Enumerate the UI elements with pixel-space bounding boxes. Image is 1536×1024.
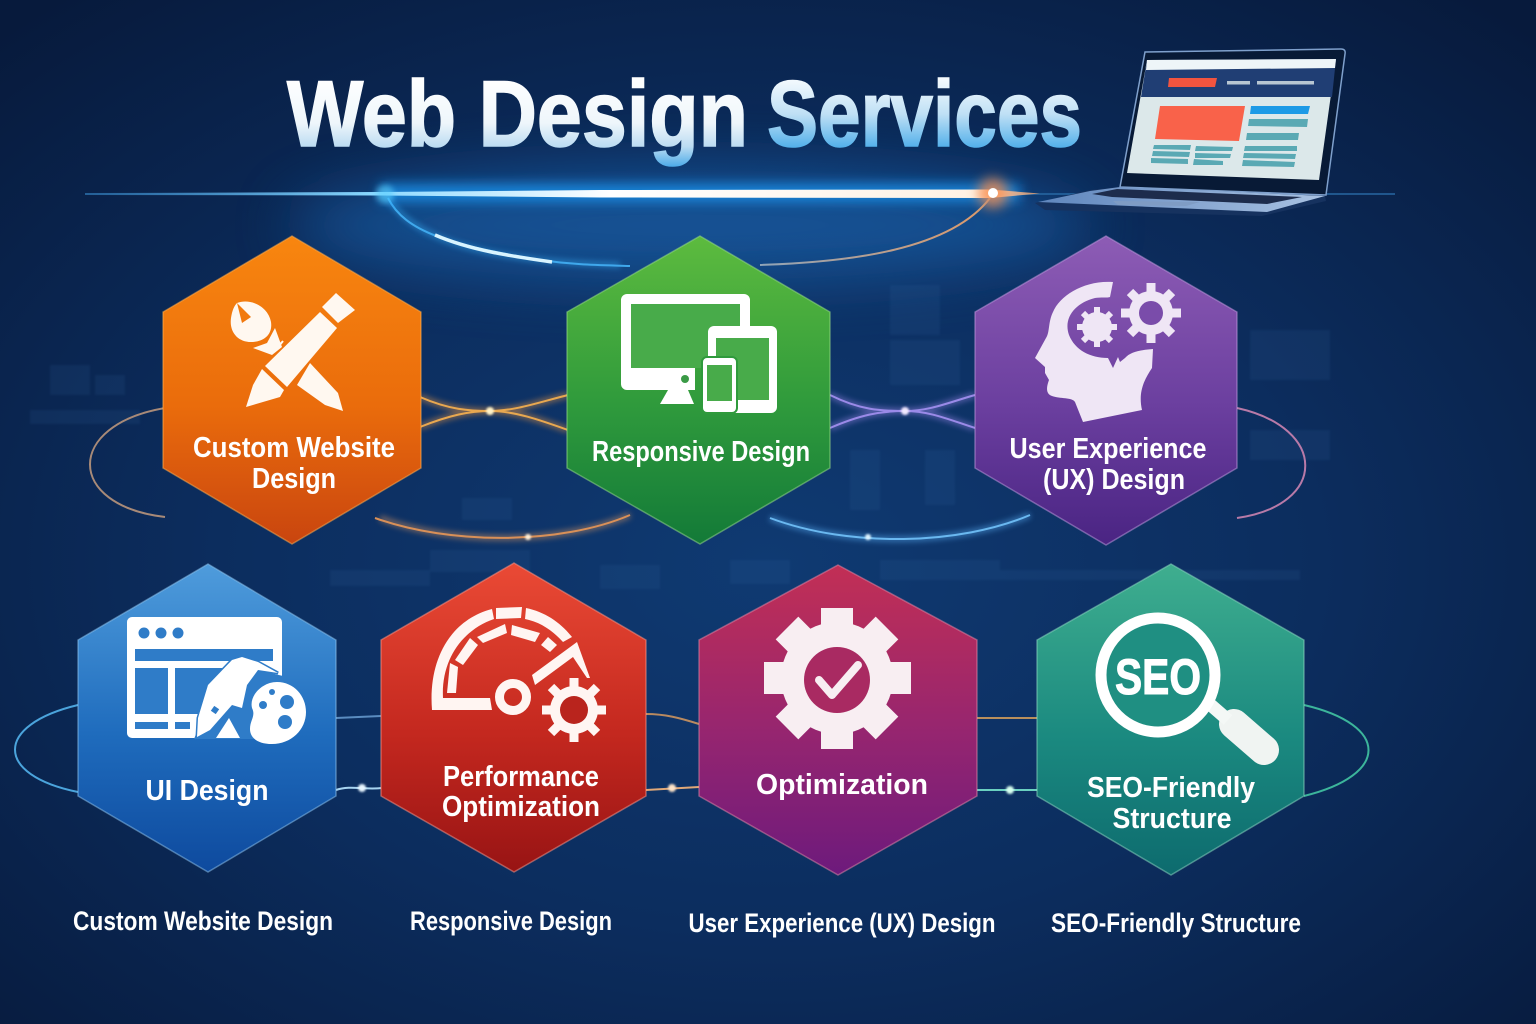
light beam: [85, 178, 1395, 208]
label: User Experience: [1010, 433, 1206, 465]
panel: Responsive Design: [567, 236, 830, 544]
decorative orbit rings: top row: [90, 395, 1305, 539]
label: Optimization: [756, 769, 928, 801]
top glowing arc: [388, 198, 990, 266]
caption: SEO-Friendly Structure: SEO-Friendly Structure: [1051, 908, 1301, 938]
decorative orbit rings: top row glow: [380, 395, 1030, 539]
label: Design: [252, 463, 336, 495]
icon: SEO magnifier: [1101, 618, 1264, 750]
label: (UX) Design: [1043, 464, 1185, 496]
panel: Performance Optimization: [381, 563, 646, 872]
icon: pencil and wrench: [231, 293, 355, 411]
label: [1087, 772, 1255, 835]
decorative orbit rings: bottom row: [15, 705, 1368, 796]
title: Web Design: [287, 61, 748, 166]
panel: Custom Website Design: [163, 236, 421, 544]
icon: laptop: [1035, 49, 1345, 216]
label: Structure: [1112, 803, 1232, 835]
background glow behind light beam: [290, 170, 1090, 280]
label: Performance: [443, 761, 599, 793]
panel: Optimization: [699, 565, 977, 875]
label: Responsive Design: [592, 436, 810, 468]
faint background website wireframes: [30, 285, 1330, 589]
icon: gauge with gear: [432, 607, 606, 742]
panel: UI Design: [78, 564, 336, 872]
caption: Custom Website Design: Custom Website Design: [73, 906, 333, 936]
icon: responsive devices: [621, 294, 777, 413]
label: Custom Website: [193, 432, 395, 464]
label: [442, 761, 600, 823]
icon: gear with checkmark: [764, 608, 911, 749]
title: Services: [767, 61, 1082, 166]
label: Optimization: [442, 791, 600, 823]
connector glints: [358, 407, 1014, 794]
icon: head with gears: [1035, 282, 1181, 422]
panel: SEO-Friendly Structure: [1037, 564, 1304, 875]
icon: SEO magnifier: SEO: [1115, 649, 1201, 705]
label: [1010, 433, 1206, 496]
caption: User Experience (UX) Design: User Experience (UX) Design: [688, 908, 996, 938]
icon: window with brush and palette: [127, 617, 306, 744]
title: [287, 61, 1082, 166]
label: [193, 432, 395, 495]
label: SEO-Friendly: [1087, 772, 1255, 804]
caption: Responsive Design: Responsive Design: [410, 906, 612, 936]
label: UI Design: [146, 775, 268, 807]
panel: User Experience (UX) Design: [975, 236, 1237, 545]
